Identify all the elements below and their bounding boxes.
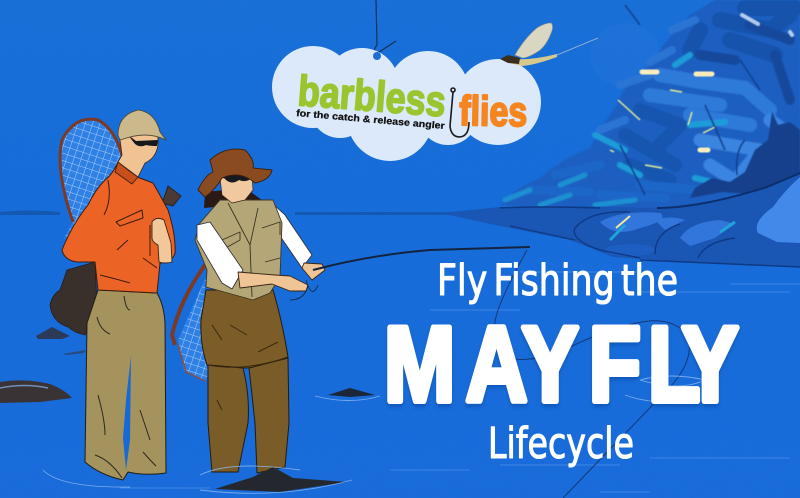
orange shirt: [62, 162, 175, 293]
dark conifer: [690, 112, 800, 198]
tree line on far bank: [500, 0, 800, 212]
face and neck: [118, 130, 158, 177]
logo wordmark barbless: barbless: [296, 67, 447, 126]
fly line across the water: [494, 250, 690, 498]
right wader leg: [249, 358, 289, 473]
sunglasses: [222, 172, 252, 182]
angler: woman casting: [172, 149, 347, 492]
highlights and branches: [610, 5, 792, 195]
left wader leg: [208, 365, 248, 472]
logo hook icon: [450, 88, 469, 137]
tan vest: [195, 200, 282, 300]
dark hair: [204, 188, 262, 218]
title line: Lifecycle: Lifecycle: [488, 419, 634, 469]
cloud shape: [272, 46, 541, 161]
second landing net: [172, 265, 208, 381]
logo cloud: [272, 46, 541, 161]
title line: Fly Fishing the: Fly Fishing the: [437, 256, 678, 306]
fishing line hanging the logo: [374, 0, 396, 54]
water ripples: [43, 376, 705, 493]
sunglasses: [128, 135, 158, 146]
trousers: [85, 290, 166, 480]
logo wordmark flies: flies: [459, 87, 528, 135]
right white sleeve: [272, 203, 312, 268]
mayfly insect: [500, 23, 598, 66]
net handle held at shoulder: [160, 186, 181, 218]
face: [220, 176, 253, 203]
angler: man with net: [50, 110, 181, 480]
dark hat on back: [50, 262, 97, 335]
raised hand: [152, 218, 172, 263]
logo tagline: for the catch & release angler: [296, 108, 445, 132]
landing net on back: [59, 119, 122, 240]
baseball cap: [118, 110, 166, 140]
bottom waders upper: [201, 290, 288, 368]
foliage mass: [500, 0, 800, 212]
forearm and hands: [238, 263, 325, 291]
fishing rod: [313, 247, 530, 270]
left white sleeve: [197, 222, 243, 289]
rock under wader: [215, 467, 347, 492]
title word: MAYFLY: MAYFLY: [384, 304, 739, 424]
brown hat: [198, 149, 272, 197]
rocks in water: [0, 327, 375, 403]
river bank with rocks: [440, 173, 800, 267]
